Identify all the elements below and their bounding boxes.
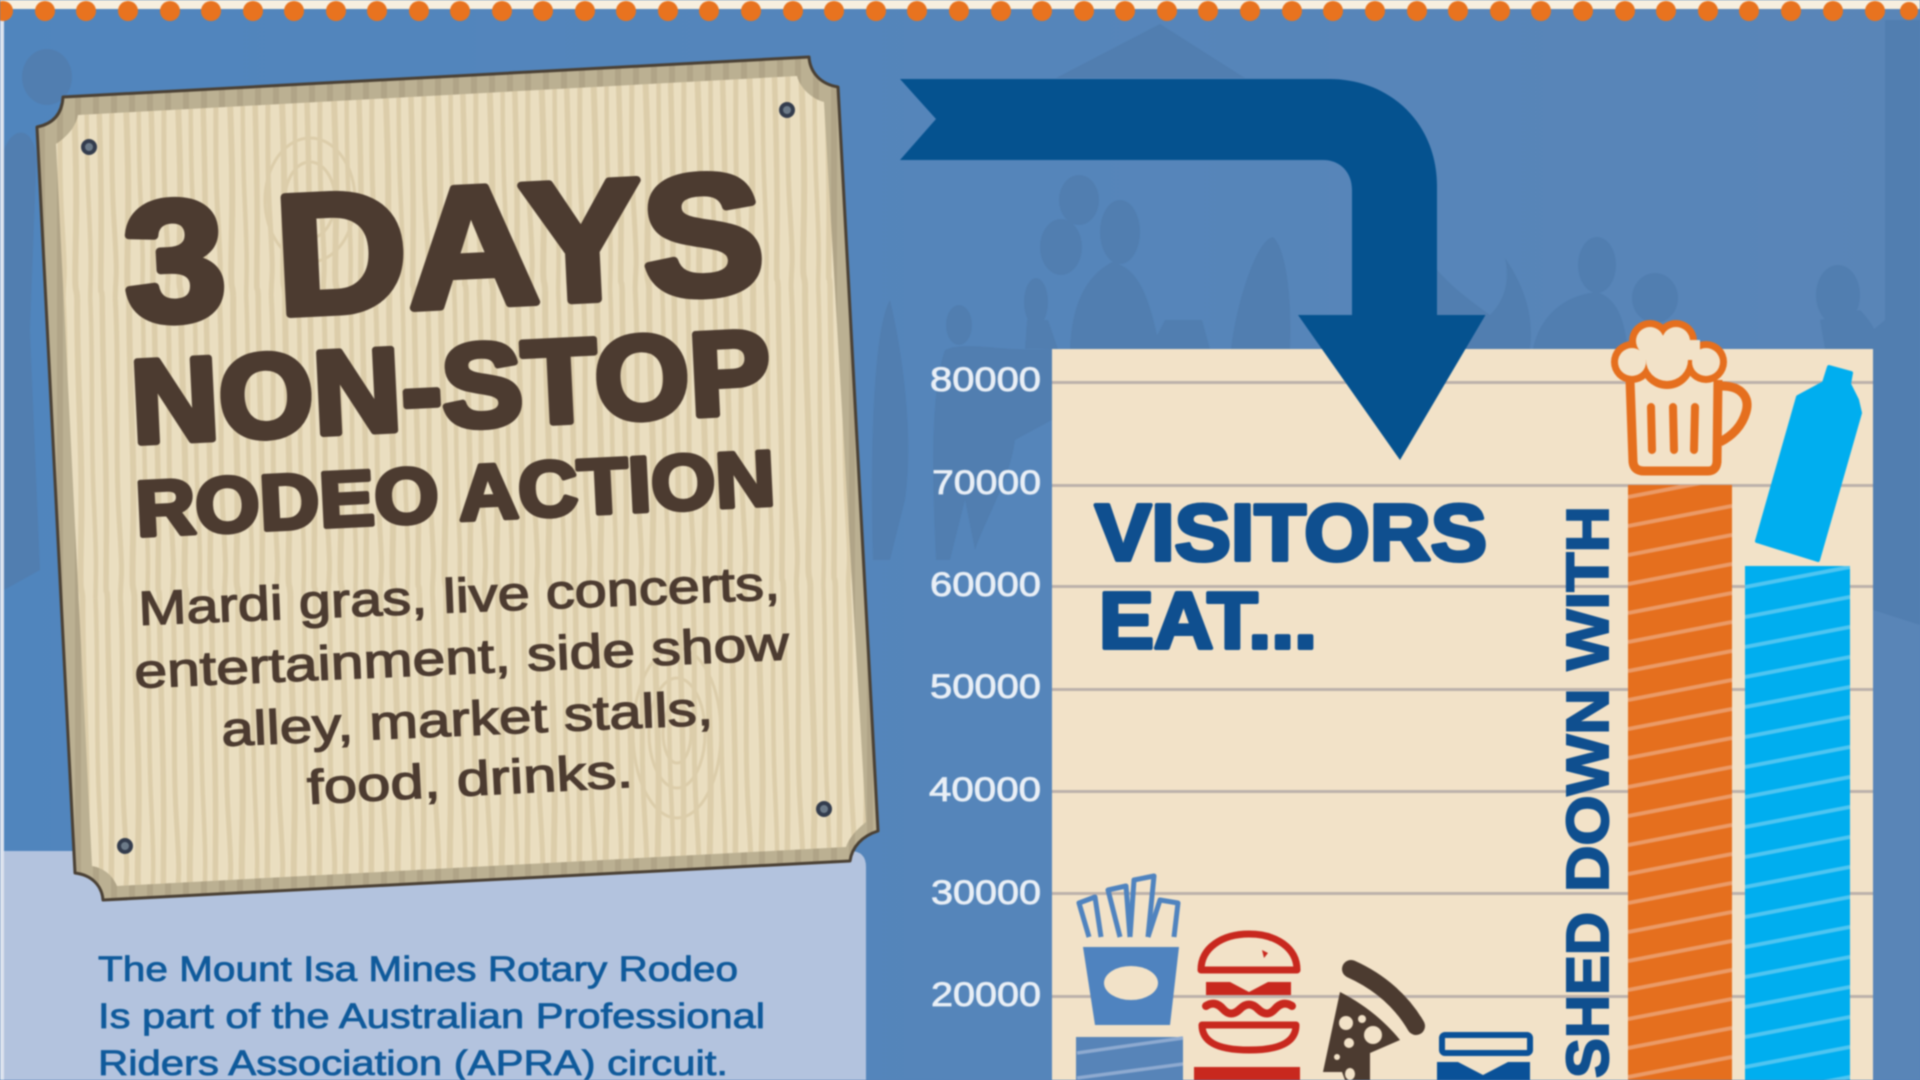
icon: pizza <box>1323 969 1416 1080</box>
grid lines <box>1052 381 1873 998</box>
arrow <box>900 79 1486 460</box>
icon: sandwich box <box>1437 1035 1530 1080</box>
heading: visitors eat <box>1095 488 1487 665</box>
y axis labels: 20000 <box>931 976 1041 1014</box>
heading: visitors eat: VISITORS <box>1095 488 1487 577</box>
vertical heading: shed down with: DOWN WITH <box>1555 506 1621 892</box>
y axis labels: 80000 <box>930 361 1041 399</box>
nails <box>83 104 830 852</box>
panel: chart background <box>1052 349 1873 1080</box>
y axis labels: 60000 <box>930 566 1041 604</box>
y axis labels: 50000 <box>930 668 1041 706</box>
top banner with orange dots <box>0 0 1920 21</box>
bar: burger <box>1194 1067 1300 1080</box>
y axis labels <box>929 361 1041 1014</box>
text: APRA circuit: Is part of the Australian Professional <box>98 997 765 1036</box>
heading: visitors eat: EAT... <box>1099 576 1317 665</box>
sign description: Mardi gras, live concerts, <box>137 557 781 636</box>
panel: APRA information <box>4 851 866 1080</box>
sign description <box>133 557 790 815</box>
sign description: entertainment, side show <box>133 617 790 699</box>
text: APRA circuit <box>98 950 765 1080</box>
y axis labels: 40000 <box>929 771 1041 809</box>
heading: 3 days non-stop rodeo action: RODEO ACTION <box>134 434 777 553</box>
y axis labels: 30000 <box>931 874 1041 912</box>
icon: burger <box>1201 934 1297 1050</box>
bar: beer <box>1628 485 1732 1080</box>
heading: 3 days non-stop rodeo action: 3 DAYS <box>120 138 768 359</box>
sign description: food, drinks. <box>306 745 634 815</box>
icon: water bottle <box>1757 367 1860 560</box>
wood grain face <box>56 76 866 886</box>
icon: fries <box>1079 876 1179 1025</box>
panel: wooden sign <box>37 57 878 900</box>
left edge strip <box>0 0 4 1080</box>
crowd silhouettes <box>4 20 1920 625</box>
icon: beer mug <box>1611 320 1747 471</box>
vertical heading: shed down with: SHED <box>1555 912 1621 1078</box>
sign board <box>37 57 878 900</box>
bar: fries <box>1076 1037 1183 1080</box>
bar: water <box>1745 566 1850 1080</box>
wood knots <box>265 138 721 818</box>
heading: 3 days non-stop rodeo action: NON-STOP <box>128 306 774 469</box>
heading: 3 days non-stop rodeo action <box>120 138 777 553</box>
sign description: alley, market stalls, <box>220 683 714 757</box>
y axis labels: 70000 <box>932 464 1041 502</box>
vertical heading: shed down with <box>1555 506 1621 1078</box>
text: APRA circuit: The Mount Isa Mines Rotary Rodeo <box>98 950 738 989</box>
